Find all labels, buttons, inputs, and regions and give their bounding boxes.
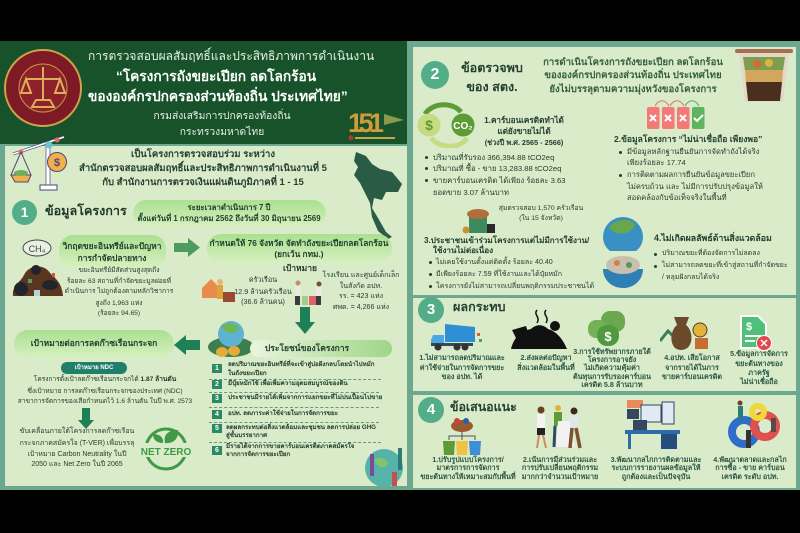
recommendation 4 line three: เครดิต ระดับ อปท. xyxy=(721,472,779,481)
recommendation 3 line two: ระบบการรายงานผลข้อมูลให้ xyxy=(612,463,700,472)
finding 3 line two: ใช้งานไม่ต่อเนื่อง xyxy=(433,246,493,255)
recommendation 2 line two: การปรับเปลี่ยนพฤติกรรม xyxy=(522,463,598,472)
icon: failed checklist xyxy=(647,100,704,129)
carbon target pill xyxy=(14,330,174,358)
section 2 badge xyxy=(421,61,449,89)
crisis line five: (ร้อยละ 94.65) xyxy=(98,310,140,317)
recommendation 1 caption xyxy=(416,454,520,484)
section 3 badge: 3 xyxy=(427,301,435,318)
impact 1 caption xyxy=(419,353,505,381)
duration: ระยะเวลาดำเนินการ 7 ปี xyxy=(187,203,271,212)
icon: audit office seal xyxy=(4,49,82,127)
icon: pollution heap xyxy=(511,310,567,349)
benefit 1 number xyxy=(212,364,222,373)
impact 2 line two: สิ่งแวดล้อมในพื้นที่ xyxy=(517,363,575,372)
statement line three: กับ สำนักงานการตรวจเงินแผ่นดินภูมิภาคที่ 1 - 15 xyxy=(102,177,304,188)
section 4 badge: 4 xyxy=(427,401,435,418)
section 2 heading xyxy=(461,61,523,94)
icon: net zero: NET ZERO xyxy=(141,447,191,458)
header kicker: การตรวจสอบผลสัมฤทธิ์และประสิทธิภาพการดำเนินงาน xyxy=(88,49,374,63)
crisis line three: ดำเนินการ ไม่ถูกต้องตามหลักวิชาการ xyxy=(65,288,173,295)
bullet dot xyxy=(619,174,622,177)
icon: people and gears xyxy=(727,400,783,450)
recommendation 3 line one: 3.พัฒนากลไกการติดตามและ xyxy=(611,455,701,464)
icon: 151 anniversary logo: 151 xyxy=(348,108,384,138)
section 4 badge xyxy=(418,397,444,423)
benefit 1 number: 1 xyxy=(215,365,219,372)
finding 3 line one: 3.ประชาชนเข้าร่วมโครงการแต่ไม่มีการใช้งาน/ xyxy=(424,236,589,245)
impact 5 line two: ขยะต้นทางของ xyxy=(735,359,783,368)
sample size: สุ่มตรวจสอบ 1,570 ครัวเรือน xyxy=(499,205,583,212)
bullet: landfill line two: / หลุมฝังกลบได้จริง xyxy=(662,274,719,281)
bullet: never used: ไม่เคยใช้งานตั้งแต่ติดตั้ง ร้อยละ 40.40 xyxy=(436,258,553,266)
households text xyxy=(234,275,292,306)
arrow: NDC to carbon neutrality xyxy=(78,408,94,429)
benefit 3 number xyxy=(212,394,222,403)
summary line two: ขององค์กรปกครองส่วนท้องถิ่น ประเทศไทย xyxy=(544,70,722,81)
benefit 2 number: 2 xyxy=(215,381,219,388)
recommendation 4 line one: 4.พัฒนาตลาดและกลไก xyxy=(713,455,787,464)
header banner xyxy=(0,41,407,144)
bullet: behaviour: โครงการยังไม่สามารถเปลี่ยนพฤติกรรมประชาชนได้ xyxy=(436,282,594,290)
schools scope: ในสังกัด อปท. xyxy=(340,282,382,290)
household people: (36.6 ล้านคน) xyxy=(241,297,285,306)
panel: audit findings xyxy=(413,47,796,295)
bullet: evidence line one: มีข้อมูลหลักฐานยืนยันการจัดทำถังได้จริง xyxy=(627,147,759,156)
findings summary xyxy=(543,56,723,95)
crisis heading line two: การกำจัดปลายทาง xyxy=(78,253,146,263)
benefit 4 number xyxy=(212,410,222,419)
crisis description xyxy=(65,266,174,317)
NDC target tag xyxy=(61,362,127,374)
neutrality line one: ขับเคลื่อนภายใต้โครงการลดก๊าซเรือน xyxy=(20,428,134,435)
bullet dot xyxy=(654,265,657,268)
finding 3 heading xyxy=(424,235,590,255)
title line two: ขององค์กรปกครองส่วนท้องถิ่น ประเทศไทย” xyxy=(88,89,348,104)
arrow: crisis to mandate xyxy=(174,238,200,257)
finding 3 bullets xyxy=(429,256,594,290)
icon: methane cloud xyxy=(22,240,52,256)
icon: map of Thailand xyxy=(354,152,402,239)
bullet: monitoring line one: การติดตามผลการยืนยันข้อมูลขยะเปียก xyxy=(627,170,755,179)
section 1 heading: ข้อมูลโครงการ xyxy=(45,204,127,218)
crisis line four: สูงถึง 1,963 แห่ง xyxy=(95,300,143,307)
impact 3 line one: 3.การใช้ทรัพยากรภายใต้ xyxy=(573,347,651,356)
benefit 3 text: ประชาชนมีรายได้เพิ่มจากการแยกขยะที่ไม่ปนเปื้อนไปขาย xyxy=(228,394,382,401)
benefit 3 number: 3 xyxy=(215,395,219,402)
carbon neutrality text xyxy=(20,426,134,468)
section 4 heading: ข้อเสนอแนะ xyxy=(450,400,517,414)
bullet: waste volume: ปริมาณขยะที่ต้องจัดการไม่ลดลง xyxy=(662,250,760,257)
impact 4 line one: 4.อปท. เสียโอกาส xyxy=(664,353,720,362)
schools text xyxy=(322,270,399,311)
icon: stacks of money xyxy=(588,311,626,347)
icon: carbon credit cycle: CO₂ xyxy=(453,121,473,132)
benefit 5 number xyxy=(212,424,222,433)
schools count: รร. = 423 แห่ง xyxy=(339,292,383,300)
recommendation 4 line two: การซื้อ - ขาย คาร์บอน xyxy=(715,463,785,472)
statement line one: เป็นโครงการตรวจสอบร่วม ระหว่าง xyxy=(131,149,275,160)
mandate line one: กำหนดให้ 76 จังหวัด จัดทำถังขยะเปียกลดโลกร้อน xyxy=(210,238,388,248)
impact 3 line four: ต้นทุนการรับรองคาร์บอน xyxy=(573,372,651,381)
finding 4 heading: 4.ไม่เกิดผลลัพธ์ด้านสิ่งแวดล้อม xyxy=(654,233,772,243)
recommendation 1 line three: ขยะต้นทางให้เหมาะสมกับพื้นที่ xyxy=(420,472,516,481)
icon: household xyxy=(202,279,235,302)
bullet: monitoring line three: สอดคล้องกับข้อเท็จจริงในพื้นที่ xyxy=(627,193,727,202)
icon: monitoring workstation xyxy=(625,400,681,450)
icon: garbage truck xyxy=(431,324,482,350)
icon: people collecting waste xyxy=(530,405,586,450)
bullet: landfill line one: ไม่สามารถลดขยะที่เข้าสู่สถานที่กำจัดขยะ xyxy=(662,262,788,269)
icon: people around globe xyxy=(365,448,403,487)
bullet: sale value: ยอดขาย 3.07 ล้านบาท xyxy=(433,188,509,197)
icon: money bag and growth xyxy=(660,315,710,351)
summary line one: การดำเนินโครงการถังขยะเปียก ลดโลกร้อน xyxy=(543,57,723,68)
icon: full waste bin xyxy=(462,209,495,234)
bullet dot xyxy=(425,179,428,182)
bullet: sale share: ขายคาร์บอนเครดิต ได้เพียง ร้อยละ 3.63 xyxy=(433,176,566,185)
finding 2 bullets xyxy=(619,147,763,202)
crisis line one: ขยะอินทรีย์มีสัดส่วนสูงสุดถึง xyxy=(79,267,159,274)
icon: carbon credit cycle xyxy=(418,102,474,148)
finding 1 heading xyxy=(484,115,564,147)
icon: waste pile xyxy=(12,265,63,296)
recommendation 3 line three: ถูกต้องและเป็นปัจจุบัน xyxy=(622,472,690,481)
impact 4 caption xyxy=(658,352,726,384)
crisis line two: ร้อยละ 63 สถานที่กำจัดขยะมูลฝอยที่ xyxy=(67,278,171,285)
joint audit statement xyxy=(79,148,327,188)
recommendation 2 caption xyxy=(516,454,604,484)
section 2 badge: 2 xyxy=(431,66,439,83)
NDC description xyxy=(18,374,192,405)
impact 1 line one: 1.ไม่สามารถลดปริมาณและ xyxy=(419,353,505,362)
bullet dot xyxy=(425,167,428,170)
bullet dot xyxy=(425,156,428,159)
schools label: โรงเรียน และศูนย์เด็กเล็ก xyxy=(323,271,399,279)
recommendation 2 line one: 2.เน้นการมีส่วนร่วมและ xyxy=(523,455,597,464)
NDC target tag: เป้าหมาย NDC xyxy=(75,365,113,371)
impact 2 line one: 2.ส่งผลต่อปัญหา xyxy=(521,353,571,362)
ministry name: กระทรวงมหาดไทย xyxy=(180,127,264,138)
recommendation 4 caption xyxy=(712,454,788,484)
neutrality line two: กระจกภาคสมัครใจ (T-VER) เพื่อบรรลุ xyxy=(20,440,134,447)
finding 2 heading: 2.ข้อมูลโครงการ “ไม่น่าเชื่อถือ เพียงพอ” xyxy=(614,134,762,144)
arrow: benefits to carbon target xyxy=(174,335,200,355)
benefits heading pill xyxy=(250,340,392,357)
finding 1 bullets xyxy=(425,152,566,197)
NDC line two: ซึ่งเป้าหมาย การลดก๊าซเรือนกระจกของประเทศ (NDC) xyxy=(27,388,183,395)
bullet dot xyxy=(619,151,622,154)
icon: earth full of waste xyxy=(603,217,643,288)
finding 1 line one: 1.คาร์บอนเครดิตทำได้ xyxy=(484,116,564,125)
benefit 6 number: 6 xyxy=(215,447,219,454)
benefit 4 number: 4 xyxy=(215,411,219,418)
section 1 badge xyxy=(12,200,37,225)
impact 1 line two: ค่าใช้จ่ายในการจัดการขยะ xyxy=(420,363,504,372)
mandate line two: (ยกเว้น กทม.) xyxy=(274,249,324,259)
neutrality line four: 2050 และ Net Zero ในปี 2065 xyxy=(31,461,123,468)
neutrality line three: เป้าหมาย Carbon Neutrality ในปี xyxy=(27,451,127,458)
benefit 6 line one: มีรายได้จากการขายคาร์บอนเครดิตภาคสมัครใจ xyxy=(226,443,354,450)
recommendation 3 caption xyxy=(608,454,704,484)
panel: project information xyxy=(5,146,407,486)
icon: balance scale: $ xyxy=(54,157,60,169)
icon: school children xyxy=(295,280,322,305)
benefit 1 line two: ในถังขยะเปียก xyxy=(228,370,267,377)
NDC line one: โครงการตั้งเป้าลดก๊าซเรือนกระจกได้ 1.87 ล้านตัน xyxy=(34,376,176,383)
section 3 badge xyxy=(418,297,444,323)
benefits heading: ประโยชน์ของโครงการ xyxy=(265,343,349,353)
bullet dot xyxy=(429,261,432,264)
icon: 151 anniversary logo xyxy=(348,108,404,140)
finding 1 line two: แต่ยังขายไม่ได้ xyxy=(497,127,551,136)
section 3 heading: ผลกระทบ xyxy=(453,300,506,314)
icon: carbon credit cycle: $ xyxy=(425,117,433,133)
impact 5 line one: 5.ข้อมูลการจัดการ xyxy=(730,349,788,358)
icon: compost bin xyxy=(735,49,793,102)
icon: stacks of money: $ xyxy=(604,329,612,344)
finding 1 period: (ช่วงปี พ.ศ. 2565 - 2566) xyxy=(485,138,563,147)
impact 5 caption xyxy=(727,348,791,388)
bullet: monitoring line two: ไม่ครบถ้วน และ ไม่มีการปรับปรุงข้อมูลให้ xyxy=(627,182,763,191)
sample note xyxy=(499,204,584,222)
benefit 4 text: อปท. ลดภาระค่าใช้จ่ายในการจัดการขยะ xyxy=(228,410,338,417)
icon: net zero xyxy=(141,428,191,470)
bullet: certified volume: ปริมาณที่รับรอง 366,394.88 tCO2eq xyxy=(433,153,554,162)
impact 2 caption xyxy=(517,353,575,372)
impact 5 line three: ภาครัฐ xyxy=(748,368,770,377)
impact 4 line two: จากรายได้ในการ xyxy=(665,363,719,372)
impact 1 line three: ของ อปท. ได้ xyxy=(442,372,482,381)
recommendation 2 line three: มากกว่าจำนวนเป้าหมาย xyxy=(522,472,598,481)
impact 3 caption xyxy=(568,346,656,390)
bullet: active use: มีเพียงร้อยละ 7.59 ที่ใช้งานและได้ปุ๋ยหมัก xyxy=(436,270,562,278)
duration dates: ตั้งแต่วันที่ 1 กรกฎาคม 2562 ถึงวันที่ 30 มิถุนายน 2569 xyxy=(137,214,321,223)
summary line three: ยังไม่บรรลุตามความมุ่งหวังของโครงการ xyxy=(549,84,717,95)
impact 3 line five: เครดิต 5.8 ล้านบาท xyxy=(581,380,643,389)
household label: ครัวเรือน xyxy=(249,275,277,284)
icon: methane cloud: CH₄ xyxy=(29,244,46,254)
icon: balance scale xyxy=(10,136,67,190)
heading line one: ข้อตรวจพบ xyxy=(461,61,523,75)
arrow: targets to benefits xyxy=(295,307,315,334)
panel: impacts xyxy=(413,298,796,391)
carbon target heading: เป้าหมายต่อการลดก๊าซเรือนกระจก xyxy=(31,338,157,348)
impact 3 line three: ไม่เกิดความคุ้มค่า xyxy=(584,363,640,372)
impact 5 line four: ไม่น่าเชื่อถือ xyxy=(740,377,778,386)
icon: rejected document: $ xyxy=(746,321,752,333)
mandate pill xyxy=(207,234,392,263)
household count: 12.9 ล้านครัวเรือน xyxy=(234,287,292,296)
bullet: traded volume: ปริมาณที่ ซื้อ - ขาย 13,283.88 tCO2eq xyxy=(433,164,561,173)
impact 4 line three: ขายคาร์บอนเครดิต xyxy=(662,372,722,381)
benefit 2 number xyxy=(212,380,222,389)
benefit 5 number: 5 xyxy=(215,425,219,432)
NDC line three: สาขาการจัดการของเสียกำหนดไว้ 1.6 ล้านตัน ในปี พ.ศ. 2573 xyxy=(18,398,192,405)
benefit 1 line one: ลดปริมาณขยะอินทรีย์ที่จะเข้าสู่บ่อฝังกลบโดยนำไปหมัก xyxy=(228,361,374,368)
recommendation 1 line one: 1.ปรับรูปแบบโครงการ/ xyxy=(432,455,504,464)
icon: globe and coins xyxy=(208,321,252,357)
benefit 5 line two: สู่ชั้นบรรยากาศ xyxy=(226,432,267,439)
bullet: evidence line two: เพียงร้อยละ 17.74 xyxy=(627,158,686,167)
benefit 6 line two: จากการจัดการขยะเปียก xyxy=(226,451,290,458)
benefit 2 text: มีปุ๋ยหมักใช้ เพื่อเพิ่มความอุดมสมบูรณ์ของดิน xyxy=(228,380,348,387)
sample provinces: (ใน 15 จังหวัด) xyxy=(519,215,563,222)
crisis pill xyxy=(59,235,166,268)
title line one: “โครงการถังขยะเปียก ลดโลกร้อน xyxy=(116,69,316,84)
section 1 badge: 1 xyxy=(21,204,28,220)
childcare count: ศพด. = 4,266 แห่ง xyxy=(333,303,389,311)
icon: sorting bins xyxy=(443,416,481,456)
crisis heading line one: วิกฤตขยะอินทรีย์และปัญหา xyxy=(63,241,161,251)
project duration pill xyxy=(133,200,326,227)
benefit 5 line one: ลดผลกระทบต่อสิ่งแวดล้อมและชุมชน ลดการปล่อย GHG xyxy=(226,424,376,431)
icon: rejected document xyxy=(740,315,772,351)
heading line two: ของ สตง. xyxy=(466,80,518,94)
finding 4 bullets xyxy=(654,248,788,281)
bullet dot xyxy=(654,253,657,256)
benefit 6 number xyxy=(212,446,222,455)
targets heading: เป้าหมาย xyxy=(283,263,317,273)
recommendation 1 line two: มาตรการการจัดการ xyxy=(437,463,499,472)
bullet dot xyxy=(429,273,432,276)
impact 3 line two: โครงการอาจยัง xyxy=(588,355,636,364)
panel: recommendations xyxy=(413,395,796,488)
department name: กรมส่งเสริมการปกครองท้องถิ่น xyxy=(153,111,291,122)
bullet dot xyxy=(429,285,432,288)
statement line two: สำนักตรวจสอบผลสัมฤทธิ์และประสิทธิภาพการดำเนินงานที่ 5 xyxy=(79,163,327,174)
